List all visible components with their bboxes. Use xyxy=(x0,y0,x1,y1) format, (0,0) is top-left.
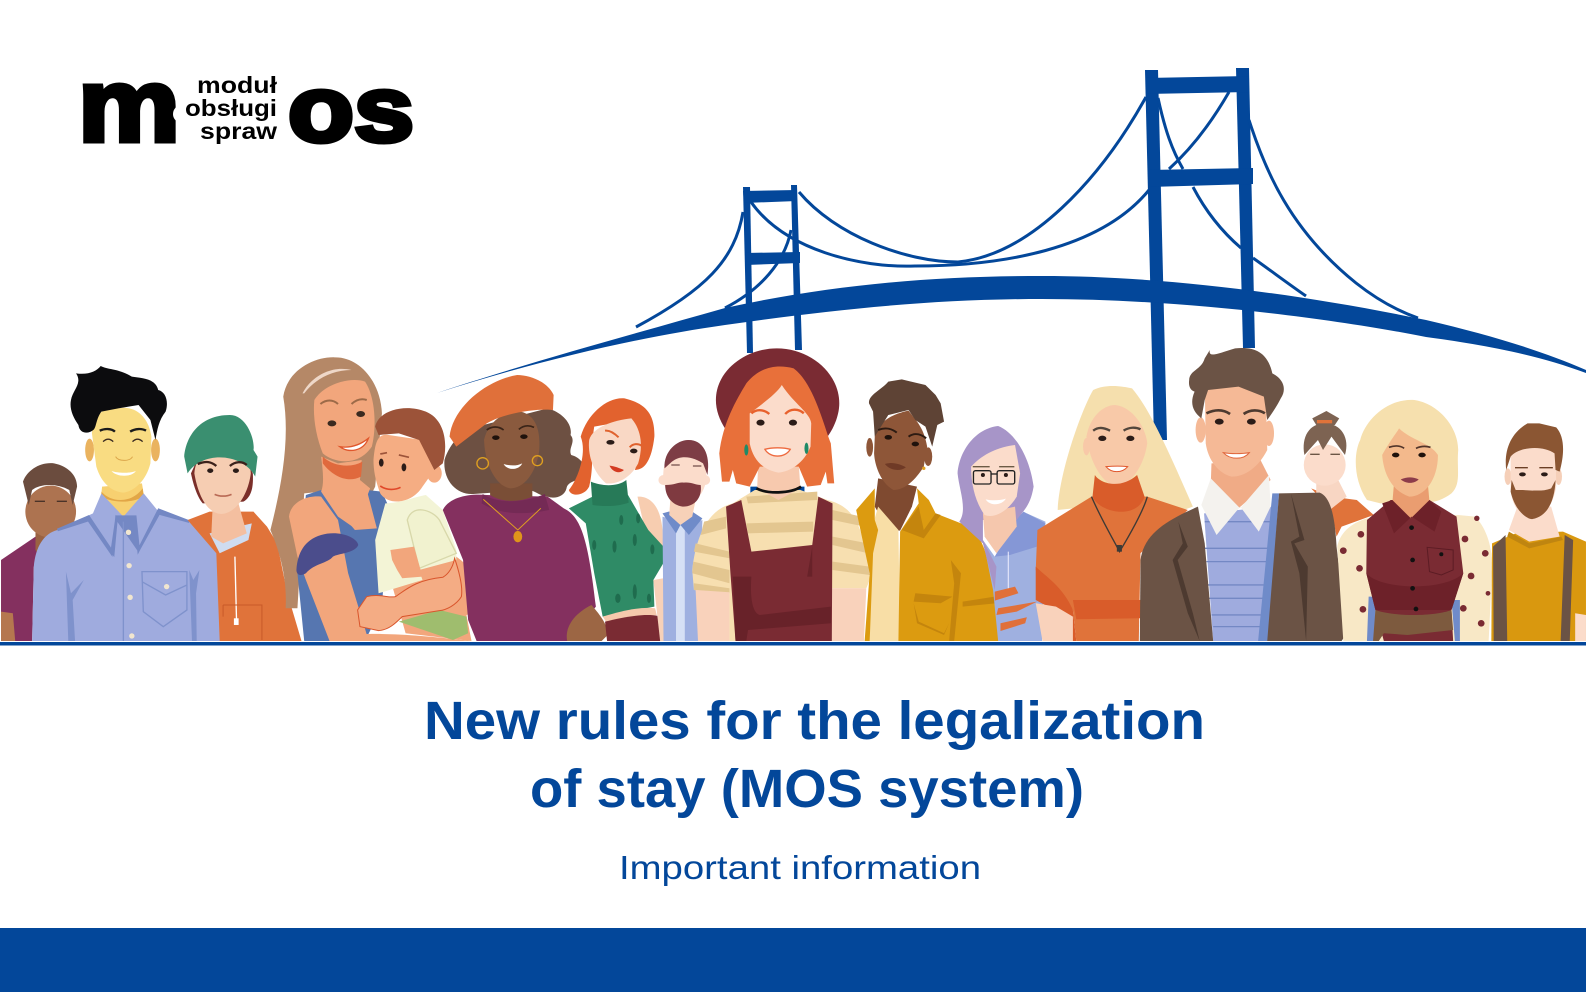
footer band xyxy=(0,928,1586,992)
large bridge tower xyxy=(1145,68,1255,440)
small bridge tower xyxy=(743,185,802,353)
person: man with yellow shirt xyxy=(856,379,1002,641)
subtitle: Important information xyxy=(619,849,981,886)
bridge suspension cables xyxy=(636,92,1418,327)
logo: MOS modul obslugi spraw: obsługi xyxy=(185,95,277,121)
person: blonde woman with maroon shirt and polka-dot sleeves xyxy=(1337,400,1492,641)
person: central woman with red hair and maroon hat xyxy=(692,348,870,641)
title: of stay (MOS system) xyxy=(530,759,1084,819)
person: woman with orange beret and purple sweater xyxy=(443,375,608,641)
bridge illustration xyxy=(437,68,1586,440)
bridge deck xyxy=(437,276,1586,393)
logo: MOS modul obslugi spraw: os xyxy=(288,57,414,161)
person: woman with lilac hair and glasses xyxy=(958,426,1045,641)
person: woman with red hair and green sweater xyxy=(569,398,665,641)
logo: MOS modul obslugi spraw: spraw xyxy=(200,118,277,144)
logo: MOS modul obslugi spraw: m xyxy=(78,48,180,164)
person: woman with long hair holding a child xyxy=(270,357,483,641)
person: back woman with hair bun xyxy=(1304,411,1374,537)
person: bearded man, back row xyxy=(653,440,710,641)
person: man in purple shirt, back row xyxy=(1,463,77,641)
ground line xyxy=(0,642,1586,646)
person: man with green beanie and orange hoodie xyxy=(184,415,301,641)
logo: MOS modul obslugi spraw xyxy=(78,48,414,164)
person: blonde woman with orange turtleneck xyxy=(1036,386,1193,641)
person: man with brown jacket xyxy=(1140,348,1347,641)
person: man with black hair and blue shirt xyxy=(32,366,223,641)
title: New rules for the legalization xyxy=(424,691,1205,751)
logo: MOS modul obslugi spraw: moduł xyxy=(197,72,278,98)
person: bearded man with yellow shirt and suspenders xyxy=(1491,423,1586,641)
